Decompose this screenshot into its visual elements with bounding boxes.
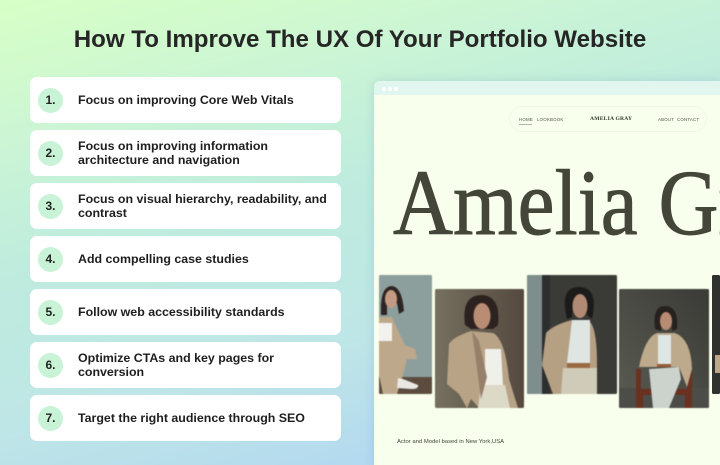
- list item 4: 4.: [45, 252, 56, 266]
- list item 3: 3.: [45, 198, 56, 212]
- caption: Actor and Model based in New York,USA: [397, 439, 504, 445]
- list item 5: [30, 289, 341, 335]
- list item 6: 6.: [45, 358, 56, 372]
- site navigation pill: AMELIA GRAY: [590, 116, 632, 122]
- list item 5: Follow web accessibility standards: [78, 305, 285, 319]
- site navigation pill: [509, 106, 707, 132]
- list item 4: Add compelling case studies: [78, 252, 249, 266]
- list item 2: Focus on improving information architecture and navigation: [78, 138, 268, 167]
- list item 7: [30, 395, 341, 441]
- list item 7: 7.: [45, 410, 56, 424]
- list item 3: [30, 183, 341, 229]
- list item 7: Target the right audience through SEO: [78, 411, 305, 425]
- site navigation pill: LOOKBOOK: [537, 117, 564, 122]
- photo 3: [526, 274, 618, 395]
- list item 1: Focus on improving Core Web Vitals: [78, 93, 294, 107]
- list item 3: Focus on visual hierarchy, readability, and contrast: [78, 192, 327, 220]
- browser top bar: [374, 81, 720, 95]
- list item 2: 2.: [45, 146, 56, 160]
- list item 5: 5.: [45, 304, 56, 318]
- list item 1: 1.: [45, 92, 56, 106]
- title: How To Improve The UX Of Your Portfolio Website: [74, 26, 646, 53]
- list item 1: [30, 77, 341, 123]
- list item 6: [30, 342, 341, 388]
- site navigation pill: HOME: [519, 117, 533, 122]
- photo 4: [618, 288, 710, 409]
- list item 4: [30, 236, 341, 282]
- site navigation pill: ABOUT: [658, 117, 674, 122]
- photo 2: [434, 288, 525, 409]
- panel: browser mockup: [374, 81, 720, 465]
- photo 1: [378, 274, 433, 395]
- site navigation pill: CONTACT: [677, 117, 699, 122]
- photo 5: [712, 275, 720, 394]
- list item 2: [30, 130, 341, 176]
- list item 6: Optimize CTAs and key pages for conversion: [78, 350, 274, 379]
